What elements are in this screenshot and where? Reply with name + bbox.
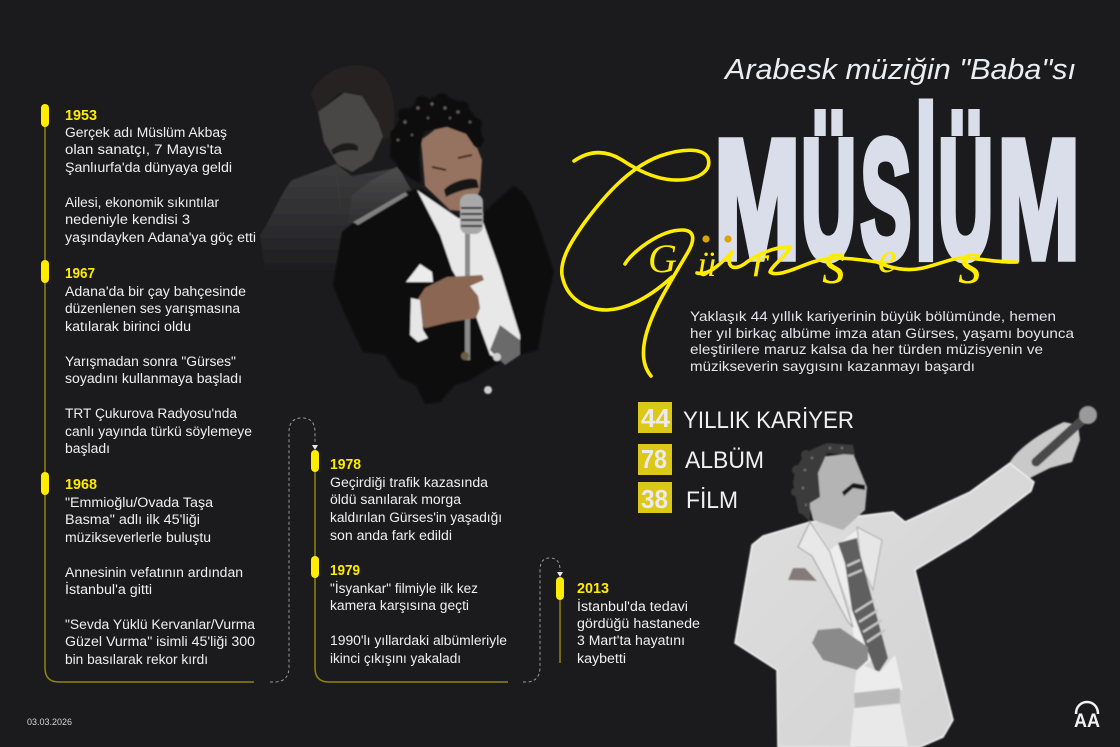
accent dots (702, 235, 710, 243)
timeline block: 1978 (311, 450, 502, 543)
timeline block: 1968: "Sevda Yüklü Kervanlar/Vurma (65, 617, 256, 632)
timeline block: 1979: 1979 (330, 563, 360, 579)
timeline block: 1968: 1968 (65, 477, 97, 493)
timeline block: 1967: başladı (65, 441, 110, 456)
stat: 44 yıllık kariyer: YILLIK KARİYER (683, 407, 854, 434)
timeline block: 1967: 1967 (65, 266, 95, 282)
script text: G (648, 236, 677, 281)
hair (791, 443, 855, 522)
lower shirt (854, 655, 903, 693)
stat: 38 film: FİLM (686, 487, 738, 514)
title: MÜSLÜM: Ü (801, 105, 856, 294)
script text: s (822, 229, 846, 297)
timeline block: 1953: 1953 (65, 108, 97, 124)
jacket (333, 186, 554, 404)
stat: 78 albüm: ALBÜM (685, 447, 764, 474)
shirt (812, 522, 872, 670)
timeline block: 1968: bin basılarak rekor kırdı (65, 652, 208, 667)
description paragraph: Yaklaşık 44 yıllık kariyerinin büyük bölümünde, hemen (690, 308, 1056, 324)
title: MÜSLÜM: S (860, 105, 911, 294)
timeline block: 1979: kamera karşısına geçti (330, 598, 469, 613)
timeline block: 1968: İstanbul'a gitti (65, 582, 152, 597)
description paragraph: eleştirilere maruz kalsa da her türden müzisyenin ve (690, 341, 1043, 357)
timeline block: 1979: "İsyankar" filmiyle ilk kez (330, 581, 478, 596)
script text: s (958, 229, 982, 297)
tie (838, 538, 888, 675)
stat: 44 yıllık kariyer: 44 (641, 403, 671, 433)
jacket shoulder highlight (353, 192, 408, 225)
suit (735, 463, 1034, 747)
logo: AA (1074, 702, 1100, 732)
timeline block: 1953: Gerçek adı Müslüm Akbaş (65, 125, 227, 140)
shirt cuff (410, 298, 428, 342)
timeline block: 1978: kaldırılan Gürses'in yaşadığı (330, 510, 502, 525)
timeline block: 1967: soyadını kullanmaya başladı (65, 371, 242, 386)
timeline block: 1968: "Emmioğlu/Ovada Taşa (65, 495, 214, 510)
stat: 78 albüm (638, 444, 764, 475)
closed eyes (432, 155, 472, 170)
stat: 78 albüm: 78 (641, 444, 667, 474)
timeline block: 1967: TRT Çukurova Radyosu'nda (65, 406, 238, 421)
timeline block: 1968: Basma" adlı ilk 45'liği (65, 512, 200, 527)
timeline block: 2013 (556, 577, 700, 666)
timeline block: 1953: nedeniyle kendisi 3 (65, 212, 190, 227)
timeline block: 1967: katılarak birinci oldu (65, 319, 191, 334)
title: MÜSLÜM: M (714, 105, 800, 294)
timeline block: 1968: Annesinin vefatının ardından (65, 565, 243, 580)
timeline block: 1953: Şanlıurfa'da dünyaya geldi (65, 160, 232, 175)
belt (854, 688, 900, 708)
timeline block: 1968: müzikseverlerle buluştu (65, 530, 211, 545)
decorative swash (562, 150, 1017, 376)
face (318, 92, 386, 172)
moustache (331, 143, 358, 155)
title: MÜSLÜM: M (998, 106, 1080, 294)
moustache (842, 483, 865, 496)
face (421, 126, 482, 212)
timeline connector lines (45, 120, 563, 682)
timeline block: 1967 (41, 260, 252, 456)
timeline block: 1953: Ailesi, ekonomik sıkıntılar (65, 195, 220, 210)
timeline block: 1979: ikinci çıkışını yakaladı (330, 651, 461, 666)
moustache (444, 179, 479, 197)
jacket (260, 164, 412, 270)
timeline block: 2013: 2013 (577, 581, 609, 597)
microphone (460, 194, 483, 360)
script text: r (752, 237, 770, 286)
timeline block: 1968: Güzel Vurma" isimli 45'liği 300 (65, 634, 255, 649)
timeline block: 1979 (311, 556, 507, 666)
hair (311, 66, 394, 140)
timeline block: 2013: 3 Mart'ta hayatını (577, 633, 685, 648)
hand on belly (812, 628, 868, 670)
hand (414, 275, 484, 328)
photo: man in white suit (735, 406, 1097, 747)
date: 03.03.2026 (27, 717, 72, 727)
timeline block: 1967: canlı yayında türkü söylemeye (65, 424, 252, 439)
pocket square (788, 568, 817, 581)
timeline block: 1968 (41, 472, 256, 667)
title: MÜSLÜM: l (915, 67, 937, 304)
script text: e (878, 236, 897, 282)
title: Gürses script (562, 150, 1017, 376)
hand raised (1010, 422, 1080, 478)
description paragraph (690, 308, 1074, 374)
photo: faded portrait in background (260, 66, 412, 270)
trousers (850, 704, 908, 747)
face (808, 453, 867, 530)
tie shading (490, 325, 520, 365)
timeline block: 1978: son anda fark edildi (330, 528, 452, 543)
timeline block: 2013: kaybetti (577, 651, 626, 666)
right lapel (857, 527, 882, 590)
stat: 44 yıllık kariyer (638, 402, 854, 434)
timeline block: 1953 (41, 104, 256, 245)
timeline block: 1967: Adana'da bir çay bahçesinde (65, 284, 246, 299)
buttons (493, 353, 501, 361)
timeline block: 1979: 1990'lı yıllardaki albümleriyle (330, 633, 507, 648)
timeline block: 1967: Yarışmadan sonra "Gürses" (65, 354, 236, 369)
shirt (417, 190, 520, 362)
timeline block: 1953: yaşındayken Adana'ya göç etti (65, 230, 256, 245)
shirt (336, 166, 410, 245)
pocket square (406, 264, 433, 282)
title: MÜSLÜM (714, 67, 1080, 304)
timeline block: 2013: İstanbul'da tedavi (577, 599, 688, 614)
photo: singing portrait with microphone (333, 93, 554, 404)
timeline block: 1978: öldü sanılarak morga (330, 492, 462, 507)
description paragraph: her yıl birkaç albüme imza atan Gürses, yaşamı boyunca (690, 325, 1074, 341)
title: MÜSLÜM: Ü (938, 105, 993, 294)
timeline block: 1978: 1978 (330, 457, 361, 473)
timeline block: 2013: gördüğü hastanede (577, 616, 700, 631)
timeline block: 1967: düzenlenen ses yarışmasına (65, 301, 241, 316)
stat: 38 film: 38 (641, 484, 668, 514)
microphone (1036, 415, 1088, 462)
logo: AA: AA (1074, 711, 1100, 732)
left lapel (798, 522, 853, 627)
description paragraph: müzikseverin saygısını kazanmayı başardı (690, 358, 975, 374)
stat: 38 film (638, 482, 738, 514)
timeline block: 1978: Geçirdiği trafik kazasında (330, 475, 489, 490)
subtitle: Arabesk müziğin "Baba"sı (723, 54, 1076, 86)
timeline block: 1953: olan sanatçı, 7 Mayıs'ta (65, 142, 223, 157)
hair (390, 93, 484, 184)
script text: ü (698, 244, 716, 284)
